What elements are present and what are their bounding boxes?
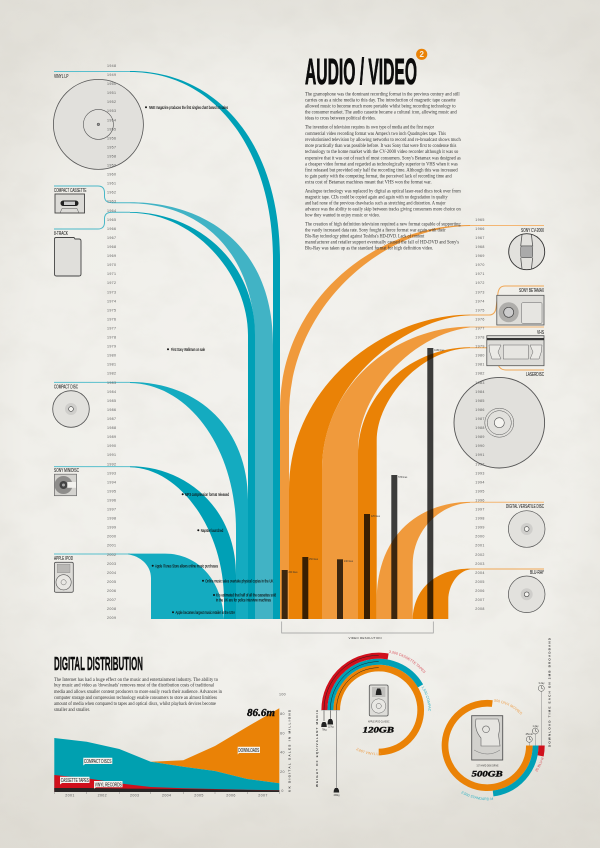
right year axis: 1969 bbox=[475, 254, 485, 258]
right year axis: 1970 bbox=[475, 263, 485, 267]
left year axis: 1981 bbox=[107, 363, 116, 367]
left year axis: 2000 bbox=[107, 535, 116, 539]
right year axis: 1980 bbox=[475, 354, 485, 358]
right year axis: 2004 bbox=[475, 571, 485, 575]
left year axis: 2007 bbox=[107, 598, 116, 602]
intro text: audio and video history: and had none of the previous drawbacks such as stretching and distortion. A major bbox=[305, 199, 446, 206]
device labels: BLU-RAY bbox=[530, 570, 544, 576]
intro text: audio and video history bbox=[305, 90, 461, 252]
label: hard disk drive: 3.5" HARD DISK DRIVE bbox=[476, 764, 498, 768]
icon: download clocks: 3 day bbox=[538, 681, 545, 685]
left year axis: 1968 bbox=[107, 245, 116, 249]
right year axis: 1965 bbox=[475, 218, 485, 222]
right year axis: 1998 bbox=[475, 517, 485, 521]
device labels: COMPACT CASSETTE bbox=[54, 188, 87, 194]
left year axis: 2005 bbox=[107, 580, 116, 584]
area: downloads bbox=[151, 708, 279, 783]
left year axis: 1985 bbox=[107, 399, 116, 403]
left year axis: 1972 bbox=[107, 281, 116, 285]
right year axis: 1999 bbox=[475, 526, 485, 530]
ring: orange bbox=[445, 703, 529, 788]
left year axis: 1948 bbox=[107, 64, 116, 68]
label: apple ipod classic: APPLE IPOD CLASSIC bbox=[368, 719, 390, 723]
right year axis: 1984 bbox=[475, 390, 485, 394]
left year axis: 1999 bbox=[107, 526, 116, 530]
badge: section number: 2 bbox=[419, 50, 424, 59]
stream: VHS bbox=[322, 327, 544, 619]
right year axis: 1967 bbox=[475, 236, 485, 240]
left year axis: 1967 bbox=[107, 236, 116, 240]
area: cassette tapes bbox=[54, 775, 279, 792]
icon: hard disk drive bbox=[472, 716, 503, 760]
right year axis: 1973 bbox=[475, 290, 485, 294]
intro text: audio and video history: manufacturer and retailer support eventually caused the fall of HD-DVD and Sony's bbox=[305, 239, 459, 246]
milestone annotations: Napster launched bbox=[201, 528, 223, 534]
ring: red bbox=[541, 746, 542, 756]
left year axis: 1952 bbox=[107, 100, 116, 104]
left year axis: 1977 bbox=[107, 326, 116, 330]
left year axis: 1984 bbox=[107, 390, 116, 394]
ring: orange vinyl equivalent bbox=[337, 668, 421, 752]
ring label: DVDs: 2,500 STANDARD MOVIES bbox=[461, 791, 494, 800]
left year axis: 1957 bbox=[107, 145, 116, 149]
callout: downloads: DOWNLOADS bbox=[238, 748, 260, 754]
milestone annotations: Apple becomes largest music retailer in the USA bbox=[176, 610, 235, 616]
left year axis: 1963 bbox=[107, 200, 116, 204]
ring label: compact discs: 1,500 COMPACT DISCS bbox=[422, 686, 431, 712]
left year axis: 2006 bbox=[107, 589, 116, 593]
intro text: audio and video history: a cheaper video format and regarded as technologically superior to VHS when it was bbox=[305, 160, 458, 167]
icon: VHS tape bbox=[487, 336, 544, 366]
left year axis: 1973 bbox=[107, 290, 116, 294]
left year axis: 1993 bbox=[107, 471, 116, 475]
left year axis: 1962 bbox=[107, 191, 116, 195]
right year axis: 2000 bbox=[475, 535, 485, 539]
left year axis: 1958 bbox=[107, 154, 116, 158]
icon: blu-ray disc bbox=[508, 576, 545, 613]
intro text: audio and video history: first released but provided only half the recording time. Although this was increased bbox=[305, 166, 458, 173]
left year axis: 1976 bbox=[107, 317, 116, 321]
icon: 8-track cartridge bbox=[54, 238, 81, 276]
x axis years: 2005 bbox=[194, 794, 204, 798]
milestone annotations: in the UK are for police interview machines bbox=[216, 598, 271, 604]
device labels: VINYL LP bbox=[54, 74, 69, 80]
chart: iPod capacity rings bbox=[315, 650, 431, 797]
right year axis: 1974 bbox=[475, 299, 485, 303]
left year axis: 1988 bbox=[107, 426, 116, 430]
weight lines bbox=[321, 655, 379, 788]
text: digital distribution description: buy music and video as 'downloads' removes most of the distribution costs of traditional bbox=[54, 682, 214, 689]
right year axis: 2001 bbox=[475, 544, 485, 548]
device labels: SONY MINIDISC bbox=[54, 468, 79, 474]
callout: vinyl records bbox=[94, 781, 122, 789]
milestone annotations: Online music sales overtake physical copies in the UK bbox=[205, 578, 274, 584]
right year axis: 1985 bbox=[475, 399, 485, 403]
left year axis: 1971 bbox=[107, 272, 116, 276]
icon: apple ipod bbox=[54, 562, 73, 592]
stream: compact cassette bbox=[54, 186, 273, 619]
right year axis: 2008 bbox=[475, 607, 485, 611]
bar chart: video resolution: 425 lines bbox=[371, 514, 380, 518]
stream: sony minidisc bbox=[54, 466, 236, 619]
intro text: audio and video history: allowed music to become much more portable whilst being recording technology to bbox=[305, 104, 456, 110]
right year axis: 1991 bbox=[475, 453, 485, 457]
left year axis: 1950 bbox=[107, 82, 116, 86]
icon: apple ipod classic bbox=[369, 685, 388, 716]
left year axis: 1956 bbox=[107, 136, 116, 140]
right year axis: 1983 bbox=[475, 381, 485, 385]
intro text: audio and video history: the vastly increased data rate. Sony fought a fierce format war again with their bbox=[305, 227, 446, 234]
left year axis: 1969 bbox=[107, 254, 116, 258]
intro text: audio and video history: The invention of television requires its own type of media and the first major bbox=[305, 124, 434, 131]
stream: sony CV-2000 bbox=[280, 225, 544, 619]
right year axis: 1981 bbox=[475, 363, 485, 367]
bar chart: video resolution bbox=[282, 348, 445, 640]
intro text: audio and video history: to gain parity with the competing format, the perceived lack of recording time and bbox=[305, 172, 452, 179]
device labels: SONY CV-2000 bbox=[521, 228, 544, 234]
intro text: audio and video history: magnetic tape. CDs could be copied again and again with no degradation in quality bbox=[305, 194, 448, 200]
title: audio / video bbox=[305, 49, 427, 92]
y axis values: 20 bbox=[280, 770, 285, 774]
device labels: COMPACT DISC bbox=[54, 384, 78, 390]
value: 120GB: 120GB bbox=[363, 724, 394, 734]
right year axis: 1989 bbox=[475, 435, 485, 439]
intro text: audio and video history: Blu-Ray technology pitted against Toshiba's HD-DVD. Lack of content bbox=[305, 233, 425, 240]
bracket: video resolution axis: VIDEO RESOLUTION bbox=[348, 636, 382, 640]
icon: download clocks: 1 day bbox=[532, 724, 539, 728]
right year axis: 1993 bbox=[475, 471, 485, 475]
device labels: LASERDISC bbox=[526, 372, 544, 378]
left year axis: 1986 bbox=[107, 408, 116, 412]
y axis values: 0 bbox=[281, 789, 284, 793]
intro text: audio and video history: how they wanted to enjoy music or video. bbox=[305, 212, 380, 218]
right year axis: 2005 bbox=[475, 580, 485, 584]
right year axis bbox=[475, 218, 485, 611]
intro text: audio and video history: the consumer market. The audio cassette became a cultural icon, allowing music and bbox=[305, 110, 457, 116]
bar chart: video resolution: 250 lines bbox=[309, 557, 318, 561]
x axis years: 2007 bbox=[258, 794, 268, 798]
right year axis: 1995 bbox=[475, 489, 485, 493]
icon: weights bbox=[321, 719, 340, 797]
left year axis: 1965 bbox=[107, 218, 116, 222]
left year axis: 1980 bbox=[107, 354, 116, 358]
milestone annotations bbox=[145, 105, 276, 616]
vertical title: weight of equivalent media: WEIGHT OF EQUIVALENT MEDIA bbox=[315, 709, 319, 787]
left year axis: 1974 bbox=[107, 299, 116, 303]
ring: teal bbox=[493, 746, 536, 794]
right year axis: 1971 bbox=[475, 272, 485, 276]
icon: sony minidisc bbox=[54, 474, 77, 496]
right year axis: 1986 bbox=[475, 408, 485, 412]
right year axis: 1997 bbox=[475, 508, 485, 512]
stream: compact disc bbox=[54, 382, 248, 619]
right year axis: 1978 bbox=[475, 336, 485, 340]
y axis title: UK DIGITAL SALES IN MILLIONS bbox=[288, 710, 292, 792]
left year axis: 1966 bbox=[107, 227, 116, 231]
right year axis: 2006 bbox=[475, 589, 485, 593]
area: vinyl records bbox=[54, 788, 279, 792]
intro text: audio and video history: extra cost of Betamax machines meant that VHS won the format war. bbox=[305, 178, 432, 185]
intro text: audio and video history: commercial video recording format was Ampex's two inch Quadruplex tape. This bbox=[305, 130, 446, 137]
text: AUDIO / VIDEO bbox=[305, 51, 417, 92]
icon: sony betamax tape bbox=[497, 295, 544, 325]
y axis values: 80 bbox=[280, 712, 285, 716]
milestone annotations: First Sony Walkman on sale bbox=[171, 347, 205, 353]
left year axis: 1991 bbox=[107, 453, 116, 457]
text: digital distribution description: computer storage and compression technology enable consumers to store an almost limitless bbox=[54, 695, 217, 701]
left year axis: 2002 bbox=[107, 553, 116, 557]
intro text: audio and video history: The creation of high definition television required a new format capable of supporting bbox=[305, 220, 461, 227]
text: digital distribution description: smaller and smaller. bbox=[54, 707, 90, 713]
left year axis: 1978 bbox=[107, 336, 116, 340]
left year axis: 2003 bbox=[107, 562, 116, 566]
left year axis: 1970 bbox=[107, 263, 116, 267]
text: DIGITAL DISTRIBUTION bbox=[54, 654, 143, 674]
right year axis: 1979 bbox=[475, 345, 485, 349]
device labels: DIGITAL VERSATILE DISC bbox=[506, 504, 544, 510]
stream: laserdisc bbox=[358, 347, 544, 619]
audio formats: teal timeline streams bbox=[54, 71, 280, 619]
icon: compact disc bbox=[53, 391, 89, 427]
right year axis: 1987 bbox=[475, 417, 485, 421]
callout: compact discs bbox=[83, 758, 112, 766]
intro text: audio and video history: revolutionised television by allowing networks to record and re-broadcast shows much bbox=[305, 137, 461, 143]
video formats: orange timeline streams bbox=[280, 225, 544, 619]
right year axis: 1976 bbox=[475, 317, 485, 321]
x axis years bbox=[54, 792, 279, 798]
left year axis: 1955 bbox=[107, 127, 116, 131]
left year axis: 1960 bbox=[107, 173, 116, 177]
y axis values: 40 bbox=[280, 750, 285, 754]
icon: DVD bbox=[508, 511, 545, 547]
vertical title: download time: DOWNLOAD TIME EACH ON 2MB BROADBAND bbox=[548, 637, 552, 747]
left year axis: 1951 bbox=[107, 91, 116, 95]
left year axis: 1995 bbox=[107, 489, 116, 493]
x axis years: 2004 bbox=[162, 794, 171, 798]
value label: 86.6m: 86.6m bbox=[247, 708, 275, 719]
intro text: audio and video history: carries on as a niche media to this day. The introduction of magnetic tape cassette bbox=[305, 97, 456, 104]
text: digital distribution description bbox=[54, 676, 222, 713]
left year axis: 1992 bbox=[107, 462, 116, 466]
device labels: SONY BETAMAX bbox=[519, 288, 544, 294]
intro text: audio and video history: more practically than was possible before. It was Sony that were first to condense this bbox=[305, 142, 456, 149]
icon: download clocks bbox=[526, 681, 545, 746]
left year axis: 1964 bbox=[107, 209, 116, 213]
ring label: blu-ray: 20 BLU-RAY bbox=[535, 757, 544, 772]
milestone annotations: Apple iTunes Store allows online music purchases bbox=[155, 563, 218, 569]
left year axis: 1949 bbox=[107, 73, 116, 77]
y axis values: 60 bbox=[280, 731, 285, 735]
left year axis: 1989 bbox=[107, 435, 116, 439]
left year axis: 1998 bbox=[107, 517, 116, 521]
icon: download clocks: 45min bbox=[526, 732, 533, 736]
right year axis: 1996 bbox=[475, 498, 485, 502]
device labels bbox=[54, 74, 544, 576]
ring label: standard movies: 500 DIVX MOVIES bbox=[494, 699, 522, 714]
text: digital distribution description: media and allows smaller content producers to more easily reach their audience. Advances in bbox=[54, 689, 222, 695]
ring label: vinyl: 2,667 VINYL LPs bbox=[356, 748, 381, 756]
bar chart: video resolution: 200 lines bbox=[288, 570, 298, 574]
right year axis: 1975 bbox=[475, 308, 485, 312]
x axis years: 2006 bbox=[226, 794, 236, 798]
stream: digital versatile disc bbox=[377, 502, 544, 619]
right year axis: 1994 bbox=[475, 480, 485, 484]
intro text: audio and video history: ideas to cross between political divides. bbox=[305, 116, 376, 122]
right year axis: 2002 bbox=[475, 553, 485, 557]
device labels: APPLE IPOD bbox=[54, 556, 73, 562]
callout: cassette tapes bbox=[60, 777, 90, 784]
milestone annotations: MP3 compression format released bbox=[185, 492, 229, 498]
icon: laserdisc bbox=[454, 377, 545, 468]
intro text: audio and video history: Analogue technology was replaced by digital as optical laser-read discs took over from bbox=[305, 187, 461, 194]
y axis values bbox=[279, 692, 286, 793]
left year axis: 1975 bbox=[107, 308, 116, 312]
left year axis: 2009 bbox=[107, 616, 116, 620]
stream: blu-ray bbox=[413, 569, 544, 619]
icon: sony CV-2000 reel bbox=[509, 234, 545, 270]
left year axis: 1997 bbox=[107, 508, 116, 512]
icon: weights: 117kg bbox=[328, 724, 334, 728]
left year axis: 2001 bbox=[107, 544, 116, 548]
right year axis: 1966 bbox=[475, 227, 485, 231]
left year axis: 1982 bbox=[107, 372, 116, 376]
x axis years: 2001 bbox=[65, 794, 75, 798]
left year axis: 1961 bbox=[107, 182, 116, 186]
intro text: audio and video history: Blu-Ray was taken up as the standard format for high definition video. bbox=[305, 245, 433, 252]
left year axis: 1979 bbox=[107, 345, 116, 349]
left year axis: 1953 bbox=[107, 109, 116, 113]
right year axis: 1968 bbox=[475, 245, 485, 249]
value: 500GB: 500GB bbox=[472, 768, 503, 778]
left year axis: 1994 bbox=[107, 480, 116, 484]
milestone annotations: It is estimated that half of all the cassettes sold bbox=[216, 593, 276, 599]
icon: compact cassette bbox=[55, 194, 84, 213]
bracket: video resolution axis bbox=[282, 622, 433, 640]
text: digital distribution description: The Internet has had a huge effect on the music and entertainment industry. The ability to bbox=[54, 676, 218, 683]
right year axis: 1977 bbox=[475, 326, 485, 330]
device labels: VHS bbox=[537, 330, 544, 336]
callout: downloads bbox=[238, 747, 260, 754]
callout: compact discs: COMPACT DISCS bbox=[84, 759, 112, 765]
intro text: audio and video history: expensive that it was out of reach of most consumers. Sony's Betamax was designed as bbox=[305, 154, 461, 161]
icon: weights: 78kg bbox=[322, 728, 327, 732]
bar chart: video resolution: 240 lines bbox=[344, 559, 353, 563]
right year axis: 1990 bbox=[475, 444, 485, 448]
right year axis: 1982 bbox=[475, 372, 485, 376]
intro text: audio and video history: advance was the ability to easily skip between tracks giving consumers more choice on bbox=[305, 206, 461, 212]
area chart: UK sales by format bbox=[54, 692, 291, 798]
callout: cassette tapes: CASSETTE TAPES bbox=[61, 778, 89, 784]
icon: weights: 460kg bbox=[334, 793, 340, 797]
right year axis: 1972 bbox=[475, 281, 485, 285]
right year axis: 1992 bbox=[475, 462, 485, 466]
x axis years: 2002 bbox=[98, 794, 107, 798]
stream: apple ipod bbox=[54, 554, 224, 619]
text: digital distribution description: amount of media when compared to tapes and optical discs, whilst playback devices become bbox=[54, 700, 217, 707]
left year axis: 1954 bbox=[107, 118, 116, 122]
right year axis: 2007 bbox=[475, 598, 485, 602]
area: compact discs bbox=[54, 738, 279, 790]
intro text: audio and video history: The gramophone was the dominant recording format in the previous century and still bbox=[305, 90, 460, 97]
ring: red cassette equivalent bbox=[324, 656, 388, 710]
y axis values: 100 bbox=[279, 692, 286, 696]
left year axis: 1996 bbox=[107, 498, 116, 502]
device labels: 8-TRACK bbox=[54, 231, 68, 237]
ring label: cassette tapes: 3,000 CASSETTE TAPES bbox=[389, 650, 426, 673]
left year axis: 1959 bbox=[107, 164, 116, 168]
x axis years: 2003 bbox=[130, 794, 139, 798]
right year axis: 1988 bbox=[475, 426, 485, 430]
bar chart: video resolution: 576 lines bbox=[398, 475, 408, 479]
right year axis: 2003 bbox=[475, 562, 485, 566]
left year axis: 2004 bbox=[107, 571, 116, 575]
stream: 8-track bbox=[54, 212, 255, 619]
intro text: audio and video history: technology to the home market with the CV-2000 video recorder although it was so bbox=[305, 149, 459, 155]
stream: sony betamax bbox=[289, 286, 544, 619]
icon: vinyl LP bbox=[53, 79, 143, 169]
left year axis: 1987 bbox=[107, 417, 116, 421]
bar chart: video resolution: 1080 lines bbox=[434, 348, 445, 352]
ring: teal compact disc equivalent bbox=[330, 662, 420, 710]
left year axis: 1990 bbox=[107, 444, 116, 448]
stream: vinyl LP bbox=[54, 71, 280, 619]
left year axis: 2008 bbox=[107, 607, 116, 611]
left year axis: 1983 bbox=[107, 381, 116, 385]
callout: vinyl records: VINYL RECORDS bbox=[95, 782, 122, 788]
left year axis bbox=[107, 64, 116, 620]
milestone annotations: NME magazine produces the first singles chart based on sales bbox=[149, 105, 228, 111]
